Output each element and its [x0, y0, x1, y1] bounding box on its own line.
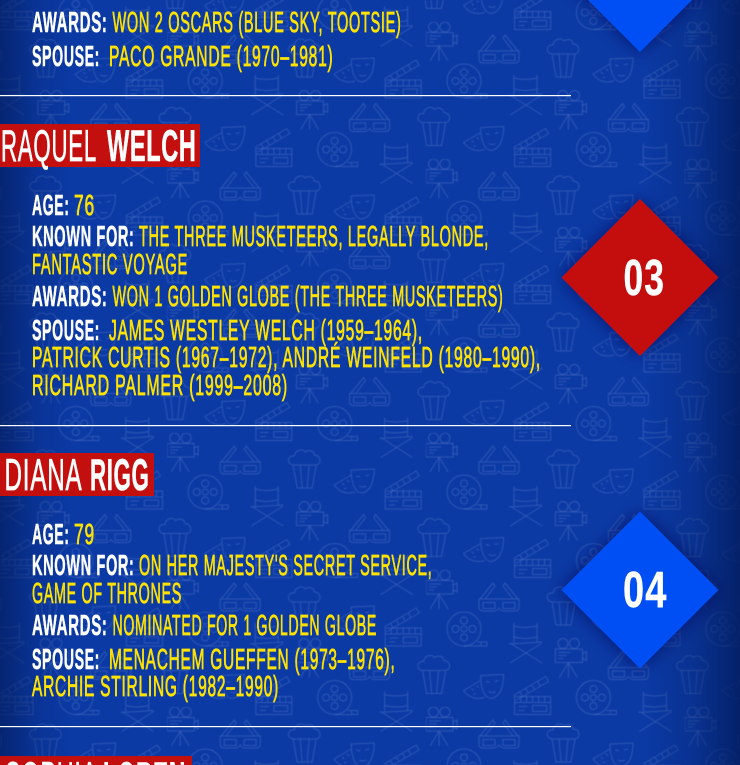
- spouse: ARCHIE STIRLING (1982–1990): [32, 671, 279, 703]
- panel: Diana Rigg: ON HER MAJESTY'S SECRET SERVICE,: [139, 550, 432, 582]
- spouse: [32, 315, 541, 402]
- spouse: MENACHEM GUEFFEN (1973–1976),: [109, 644, 396, 676]
- spouse line: PACO GRANDE (1970–1981): [109, 41, 334, 73]
- name banner: RAQUEL: [1, 122, 97, 171]
- awards line: [32, 7, 402, 39]
- panel: Sophia Loren (cropped): [0, 754, 192, 765]
- panel: Diana Rigg: [0, 451, 718, 703]
- rank diamond: blue, cropped: [562, 0, 718, 52]
- awards: [32, 610, 377, 642]
- name banner: DIANA: [4, 451, 82, 500]
- known for: KNOWN FOR:: [32, 221, 134, 253]
- age: 79: [74, 519, 95, 551]
- name banner: [0, 756, 192, 765]
- awards: AWARDS:: [32, 281, 108, 313]
- awards: AWARDS:: [32, 610, 108, 642]
- panel: previous entry (cropped): [32, 0, 718, 73]
- known for: [32, 550, 432, 610]
- panel: Raquel Welch: [0, 122, 718, 402]
- name banner: WELCH: [107, 122, 196, 171]
- awards line: AWARDS:: [32, 7, 108, 39]
- age: AGE:: [32, 190, 70, 222]
- spouse: SPOUSE:: [32, 315, 100, 347]
- rank diamond 04: 04: [623, 561, 668, 618]
- spouse: JAMES WESTLEY WELCH (1959–1964),: [109, 315, 423, 347]
- age: AGE:: [32, 519, 70, 551]
- panel: Diana Rigg: NOMINATED FOR 1 GOLDEN GLOBE: [112, 610, 377, 642]
- known for: KNOWN FOR:: [32, 550, 134, 582]
- rank diamond 03: [562, 199, 718, 356]
- awards: [32, 281, 504, 313]
- name banner: RIGG: [90, 451, 150, 500]
- panel: previous entry (cropped): WON 2 OSCARS (BLUE SKY, TOOTSIE): [112, 7, 402, 39]
- rank diamond 04: [562, 512, 718, 668]
- spouse line: SPOUSE:: [32, 41, 100, 73]
- known for: FANTASTIC VOYAGE: [32, 249, 188, 281]
- spouse: [32, 644, 396, 703]
- spouse: RICHARD PALMER (1999–2008): [32, 370, 288, 402]
- rank diamond 03: 03: [624, 249, 665, 306]
- spouse: SPOUSE:: [32, 644, 100, 676]
- age: 76: [74, 190, 95, 222]
- known for: GAME OF THRONES: [32, 578, 182, 610]
- spouse line: [32, 41, 334, 73]
- known for: [32, 221, 489, 281]
